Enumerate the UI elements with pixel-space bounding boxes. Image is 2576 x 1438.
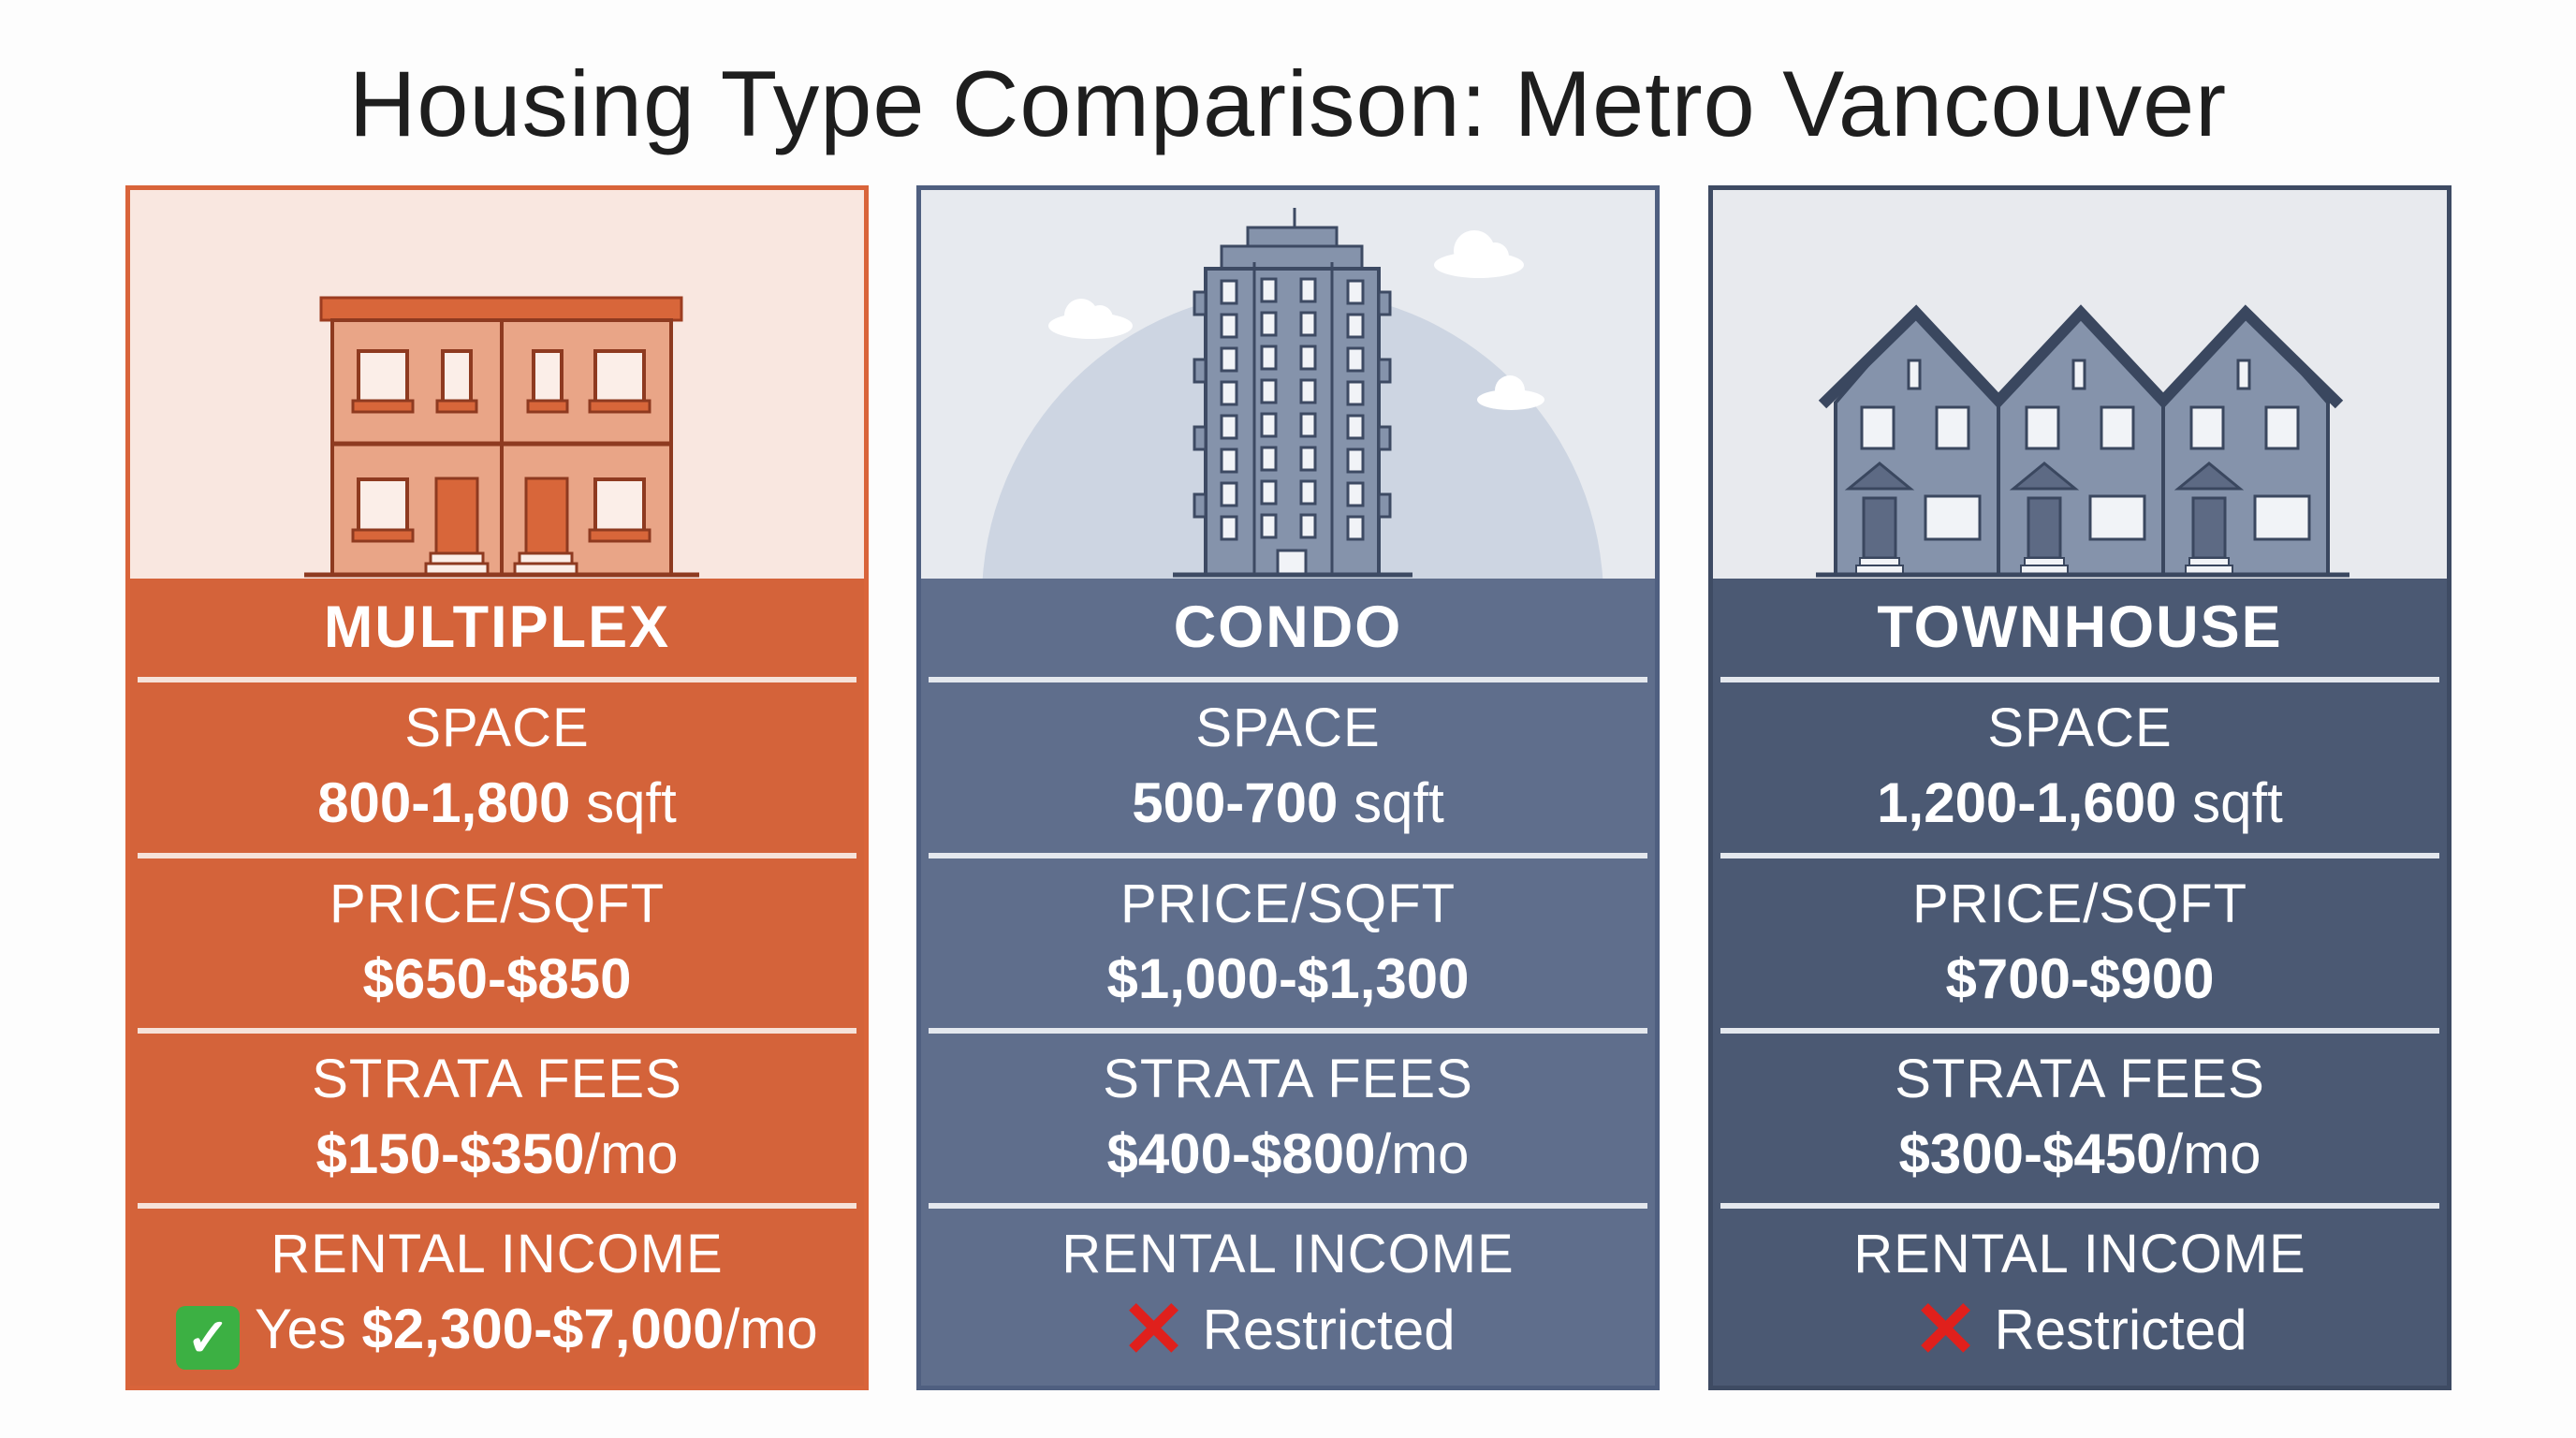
- panel: condo: [916, 185, 1660, 1390]
- heading: townhouse: TOWNHOUSE: [1877, 594, 2283, 660]
- row: strata: STRATA FEES: [1103, 1049, 1473, 1109]
- illustration: condo tower: [921, 190, 1655, 579]
- panel: townhouse: [1708, 185, 2452, 1390]
- row: space: [1132, 697, 1444, 834]
- row: strata: [312, 1049, 682, 1185]
- row: strata: $150-$350/mo: [316, 1123, 678, 1185]
- heading: condo: CONDO: [1174, 594, 1402, 660]
- row: rental: RENTAL INCOME: [1061, 1224, 1515, 1284]
- row: space: 500-700 sqft: [1132, 771, 1444, 834]
- row: price: PRICE/SQFT: [1912, 873, 2247, 934]
- row: price: [1912, 873, 2247, 1010]
- heading: multiplex: MULTIPLEX: [324, 594, 670, 660]
- row: price: $650-$850: [363, 947, 631, 1010]
- row: price: $1,000-$1,300: [1106, 947, 1470, 1010]
- row: price: PRICE/SQFT: [1120, 873, 1456, 934]
- row: rental: ✕ Restricted: [1120, 1285, 1456, 1373]
- row: space: SPACE: [1987, 697, 2173, 758]
- row: strata: [1103, 1049, 1473, 1185]
- row: rental: RENTAL INCOME: [1853, 1224, 2306, 1284]
- title: Housing Type Comparison: Metro Vancouver: [349, 51, 2227, 155]
- row: price: [1106, 873, 1470, 1010]
- illustration: townhouses: [1713, 190, 2447, 579]
- row: strata: STRATA FEES: [1895, 1049, 2265, 1109]
- row: space: 1,200-1,600 sqft: [1877, 771, 2283, 834]
- row: strata: STRATA FEES: [312, 1049, 682, 1109]
- row: space: [317, 697, 677, 834]
- row: space: [1877, 697, 2283, 834]
- row: strata: $400-$800/mo: [1107, 1123, 1469, 1185]
- row: price: $700-$900: [1946, 947, 2214, 1010]
- row: space: 800-1,800 sqft: [317, 771, 677, 834]
- row: strata: $300-$450/mo: [1899, 1123, 2261, 1185]
- panel: multiplex: [125, 185, 869, 1390]
- row: rental: ✕ Restricted: [1912, 1285, 2247, 1373]
- row: price: PRICE/SQFT: [329, 873, 665, 934]
- row: strata: [1895, 1049, 2265, 1185]
- illustration: multiplex building: [130, 190, 864, 579]
- row: rental: [176, 1224, 818, 1370]
- row: rental: RENTAL INCOME: [271, 1224, 724, 1284]
- row: rental: [1061, 1224, 1515, 1373]
- row: rental: [1853, 1224, 2306, 1373]
- row: price: [329, 873, 665, 1010]
- row: rental: Yes $2,300-$7,000/mo: [255, 1298, 818, 1360]
- row: rental: ✓: [186, 1308, 230, 1367]
- row: space: SPACE: [1195, 697, 1381, 758]
- row: space: SPACE: [404, 697, 590, 758]
